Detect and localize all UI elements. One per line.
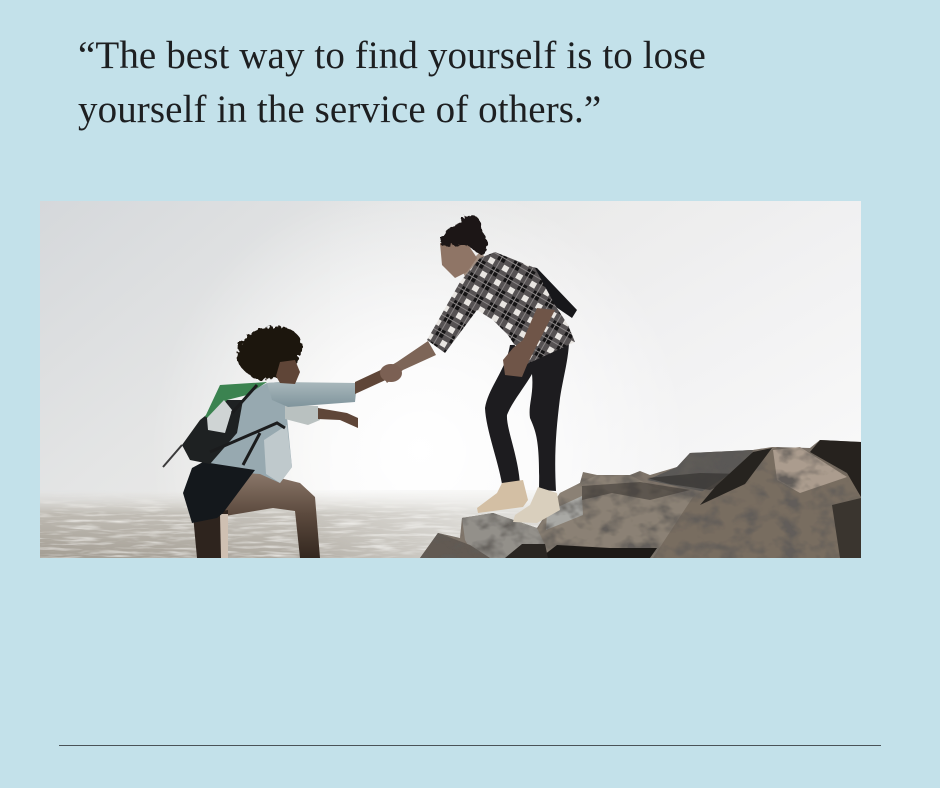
right arm and hand: [503, 308, 555, 377]
hiker on the left, climbing: [163, 327, 402, 558]
title: quote: “The best way to find yourself is to lose: [78, 34, 706, 77]
reaching sleeve: [267, 382, 357, 407]
rocks: [420, 440, 861, 558]
backpack: [182, 400, 243, 464]
clasped hands: [380, 364, 402, 382]
face: [440, 243, 477, 278]
trekking stick: [163, 445, 182, 467]
thigh and front leg: [212, 470, 320, 558]
divider rule: [59, 745, 881, 746]
curly hair: [237, 327, 302, 380]
title: quote: [78, 34, 706, 131]
shoes: [477, 480, 528, 513]
straps: [210, 385, 285, 465]
shirt body: [205, 382, 292, 483]
hiker on the right, reaching down: [380, 215, 577, 523]
sky: [40, 201, 861, 558]
plaid shirt and sleeve: [427, 252, 575, 364]
lower sleeve: [285, 405, 320, 425]
photo: two hikers helping each other on a summit: [40, 201, 861, 558]
shorts: [183, 462, 255, 523]
forearm to handshake: [380, 341, 436, 383]
backpack: [490, 258, 577, 318]
leggings: [485, 343, 569, 491]
face: [276, 360, 300, 384]
hair with bun: [440, 215, 488, 256]
title: quote: yourself in the service of others.”: [78, 88, 601, 131]
landscape below the horizon: [40, 490, 580, 558]
rear leg: [193, 510, 228, 558]
forearms: [355, 367, 390, 394]
neck: [462, 252, 490, 292]
